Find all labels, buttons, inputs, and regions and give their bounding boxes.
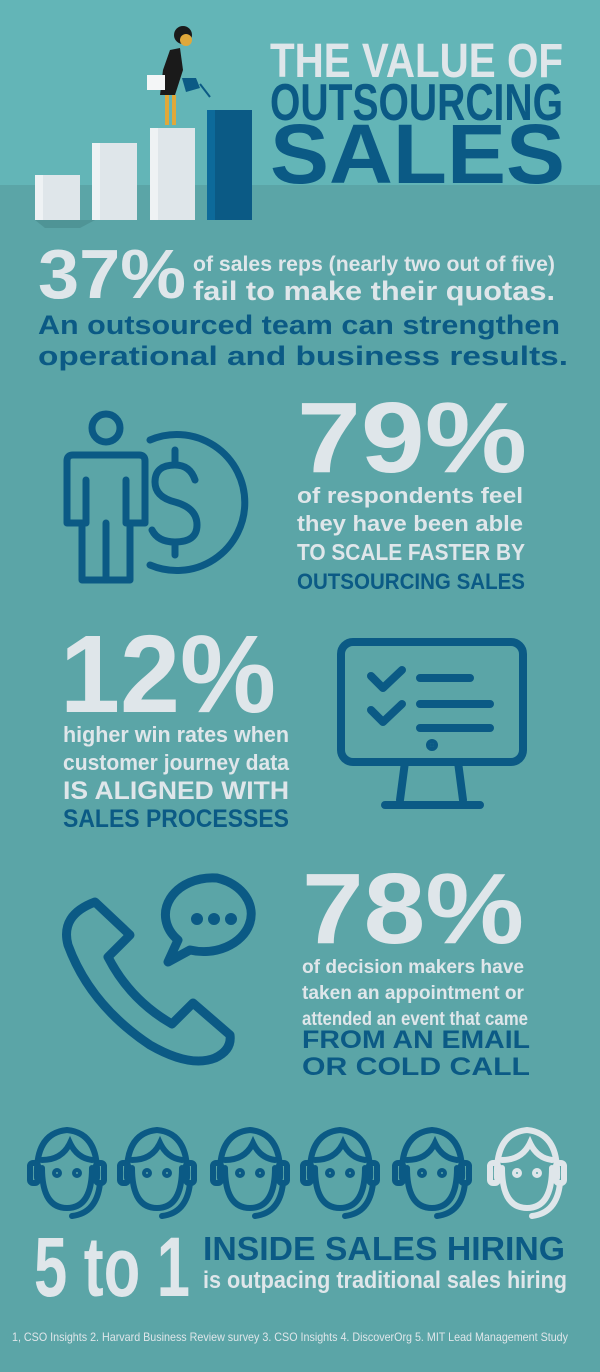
stat: 79%: OUTSOURCING SALES — [297, 569, 525, 594]
stat: 5 to 1 — [34, 1220, 567, 1314]
stat: 5 to 1: is outpacing traditional sales hiring — [203, 1267, 567, 1294]
stat: 37%: 37% — [38, 235, 186, 313]
stat: 12%: customer journey data — [63, 750, 290, 775]
stat: 78%: taken an appointment or — [302, 983, 525, 1004]
header illustration: bar chart with woman — [35, 26, 252, 228]
stat: 37% — [38, 235, 568, 371]
icons: headset agents — [30, 1130, 564, 1216]
stat: 79%: of respondents feel — [297, 483, 523, 508]
stat: 37%: operational and business results. — [38, 341, 568, 371]
woman — [147, 26, 210, 125]
title — [270, 35, 565, 201]
stat: 12% — [60, 613, 290, 833]
stat: 79%: TO SCALE FASTER BY — [297, 539, 525, 565]
stat: 12%: 12% — [60, 613, 276, 736]
stat: 78% — [302, 853, 530, 1081]
stat: 37%: of sales reps (nearly two out of five) — [193, 253, 555, 276]
stat: 78%: FROM AN EMAIL — [302, 1026, 530, 1054]
stat: 37%: An outsourced team can strengthen — [38, 310, 560, 340]
stat: 12%: IS ALIGNED WITH — [63, 777, 289, 805]
stat: 12%: higher win rates when — [63, 722, 289, 747]
stat: 78%: attended an event that came — [302, 1009, 528, 1030]
icon: person with dollar — [67, 414, 245, 580]
stat: 79%: they have been able — [297, 511, 523, 536]
title: SALES — [270, 107, 565, 201]
stat: 78%: of decision makers have — [302, 957, 524, 978]
stat: 79% — [297, 382, 527, 594]
stat: 12%: SALES PROCESSES — [63, 805, 289, 833]
stat: 5 to 1: 5 to 1 — [34, 1220, 190, 1314]
icon: phone and speech bubble — [67, 878, 251, 1061]
stat: 78%: 78% — [302, 853, 524, 965]
stat: 78%: OR COLD CALL — [302, 1053, 530, 1081]
stat: 37%: fail to make their quotas. — [193, 276, 555, 306]
stat: 79%: 79% — [297, 382, 527, 494]
icon: monitor with checklist — [341, 642, 523, 805]
stat: 5 to 1: INSIDE SALES HIRING — [203, 1230, 565, 1267]
